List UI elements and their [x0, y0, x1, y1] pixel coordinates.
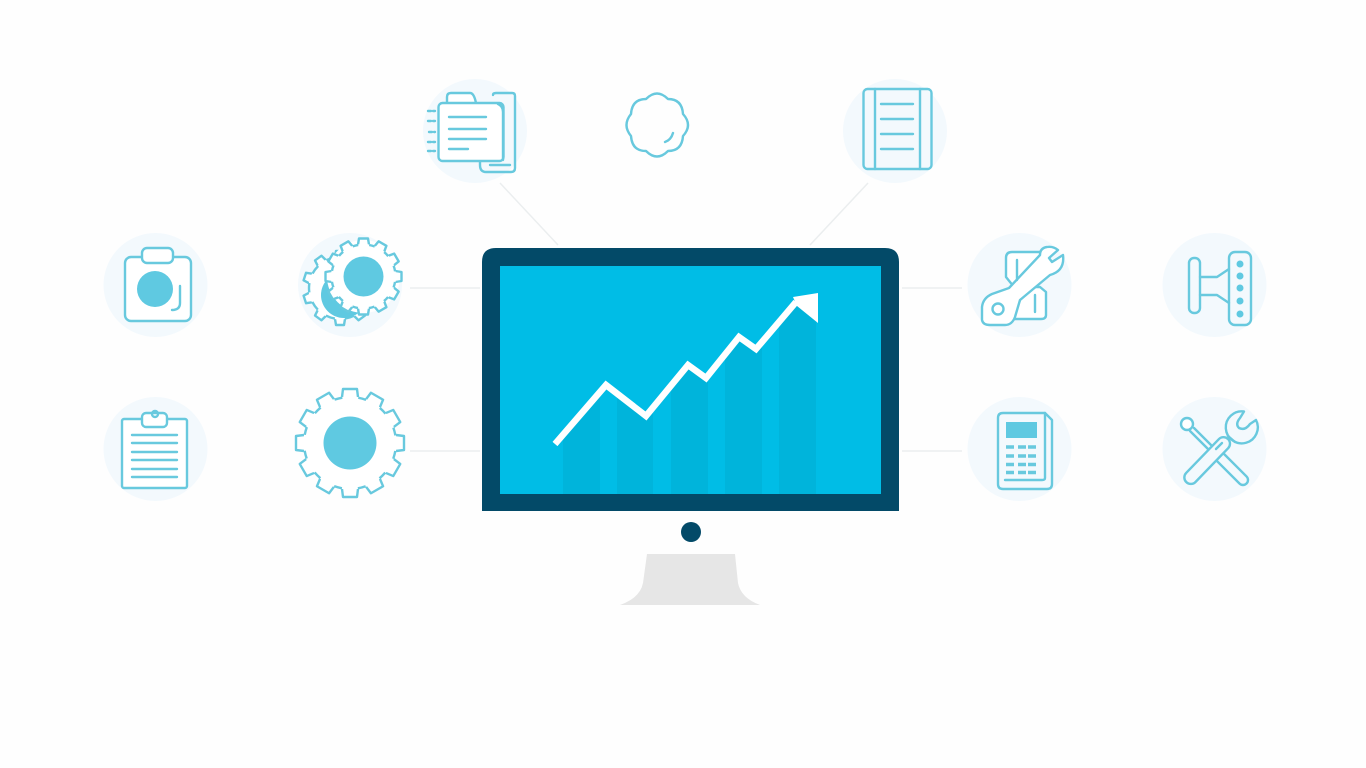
icon: wavy blob [626, 94, 688, 156]
icon: key and wrench [968, 233, 1072, 337]
icon: checklist clipboard [104, 397, 208, 501]
icon: double gears [298, 233, 402, 337]
front gear [326, 238, 402, 314]
icon: connector bracket [1162, 233, 1266, 337]
monitor stand [620, 554, 760, 605]
back gear [303, 251, 377, 325]
monitor [482, 248, 899, 605]
power button [681, 522, 701, 542]
icon: crossed tools [1162, 397, 1266, 501]
icon: large gear [296, 389, 404, 497]
icon: calculator [968, 397, 1072, 501]
monitor frame [482, 248, 899, 511]
icon: notebook [843, 79, 947, 183]
bar chart [563, 302, 816, 494]
icon: clipboard with circle [104, 233, 208, 337]
icon: documents folder [423, 79, 527, 183]
trend arrow head [793, 293, 818, 323]
trend line [555, 302, 796, 444]
monitor screen [500, 266, 881, 494]
